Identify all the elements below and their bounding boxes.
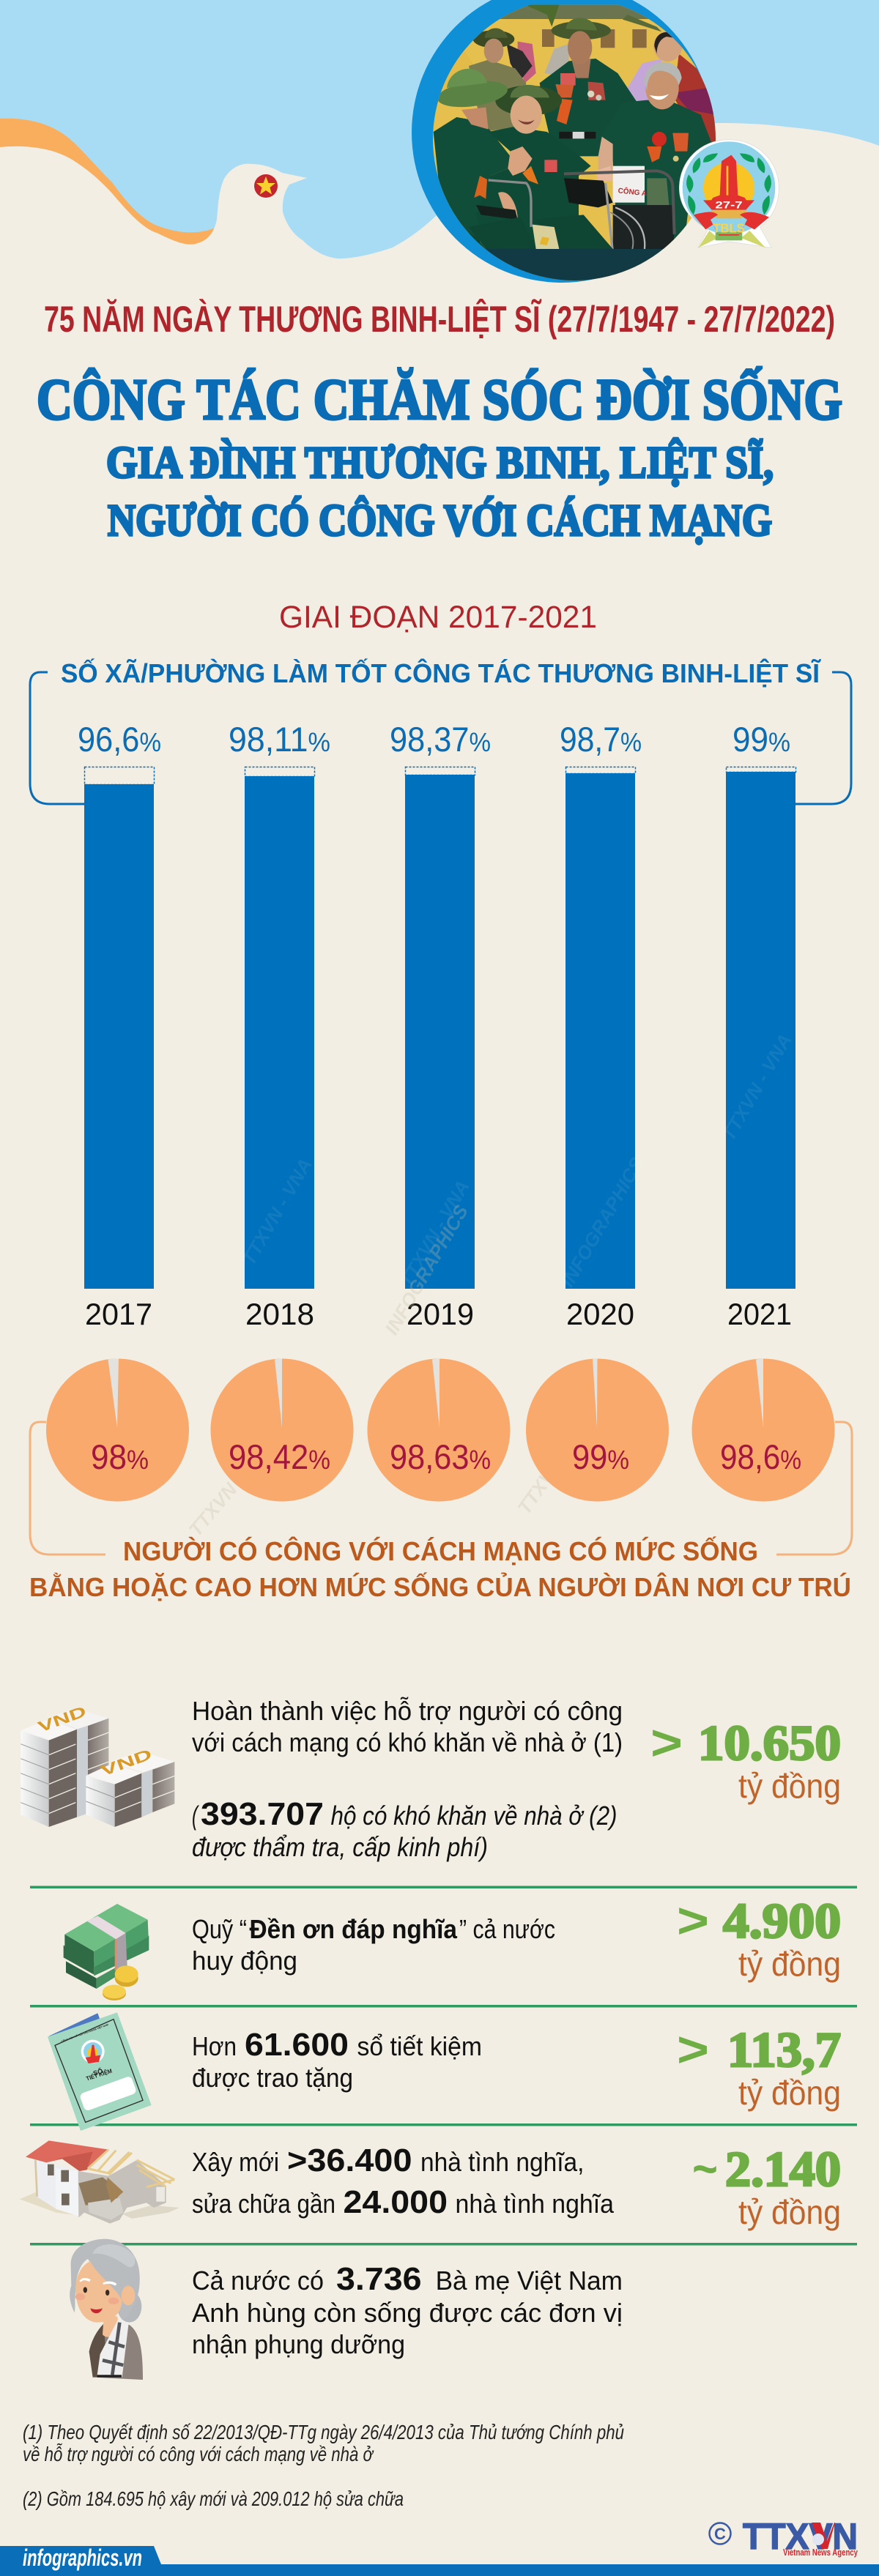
- row 4 value: [692, 2141, 841, 2231]
- icon: VND money stacks: [21, 1703, 174, 1827]
- photo circle: veterans in wheelchairs: [412, 0, 745, 283]
- icon: green banknote bundle with coins: [64, 1904, 149, 2000]
- row 3 value: >: [677, 2022, 709, 2077]
- chart caption: NGƯỜI CÓ CÔNG VỚI CÁCH MẠNG CÓ MỨC SỐNG: [123, 1535, 758, 1566]
- row 5 text: Vietnamese heroic mothers: Cả nước có: [192, 2266, 324, 2296]
- footnotes: [23, 2421, 624, 2510]
- title: NGƯỜI CÓ CÔNG VỚI CÁCH MẠNG: [108, 496, 772, 546]
- bar: 2019: 2019: [407, 1297, 474, 1331]
- icon: TBLS 27-7 emblem: [679, 140, 779, 247]
- row 3 text: savings books: 61.600: [245, 2027, 349, 2063]
- pie: 2020 99%: [526, 1359, 669, 1501]
- row 2 text: fund: Quỹ “: [192, 1914, 247, 1944]
- row 2 value: [677, 1893, 841, 1983]
- bar: 2017: 96,6%: [78, 720, 161, 759]
- pie: 2021 98,6%: 98,6%: [720, 1437, 801, 1476]
- watermarks over bars: TTXVN - VNA: [717, 1030, 796, 1144]
- row 4 text: new and repaired houses: nhà tình nghĩa: [456, 2189, 615, 2219]
- pie: 2020 99%: 99%: [572, 1437, 629, 1476]
- pie: 2021 98,6%: [691, 1359, 835, 1501]
- bar: 2020: 98,7%: [560, 720, 642, 759]
- row 2 text: fund: huy động: [192, 1946, 297, 1976]
- bracket: orange: [30, 1422, 852, 1555]
- pie: 2017 98%: [46, 1358, 189, 1501]
- watermarks over bars: TTXVN - VNA: [513, 1408, 600, 1518]
- footnotes: (1) Theo Quyết định số 22/2013/QĐ-TTg ngày 26/4/2013 của Thủ tướng Chính phủ: [23, 2421, 624, 2443]
- watermarks over bars: TTXVN - VNA: [237, 1155, 316, 1269]
- orange ribbon wave: [0, 119, 217, 253]
- icon: savings passbook: [48, 2012, 152, 2131]
- row 2 text: fund: Đền ơn đáp nghĩa: [249, 1914, 458, 1944]
- bar chart: [78, 720, 795, 1331]
- pie: 2019 98,63%: 98,63%: [390, 1437, 491, 1476]
- row 1 value: >: [650, 1715, 683, 1771]
- row 3 text: savings books: sổ tiết kiệm: [357, 2031, 482, 2061]
- footnotes: về hỗ trợ người có công với cách mạng về nhà ở: [23, 2443, 374, 2465]
- icon: TBLS 27-7 emblem: 27-7: [715, 198, 743, 210]
- row 1 value: [650, 1715, 841, 1805]
- row 3 text: savings books: [192, 2027, 482, 2093]
- footnotes: (2) Gồm 184.695 hộ xây mới và 209.012 hộ sửa chữa: [23, 2487, 404, 2510]
- row 3 text: savings books: Hơn: [192, 2031, 237, 2061]
- row 1 text: housing support: được thẩm tra, cấp kinh phí): [192, 1832, 488, 1862]
- pie: 2017 98%: 98%: [91, 1437, 149, 1476]
- bar: 2020: [560, 720, 642, 1331]
- row 2 text: fund: [192, 1914, 555, 1976]
- row 2 value: tỷ đồng: [738, 1945, 841, 1983]
- row 5 text: Vietnamese heroic mothers: [192, 2261, 623, 2359]
- watermarks over bars: TTXVN - VNA: [395, 1177, 474, 1291]
- row 2 value: 4.900: [723, 1893, 841, 1948]
- row 5 text: Vietnamese heroic mothers: Anh hùng còn sống được các đơn vị: [192, 2298, 623, 2328]
- row 3 value: tỷ đồng: [738, 2074, 841, 2112]
- row 4 text: new and repaired houses: sửa chữa gần: [192, 2189, 335, 2219]
- row 3 value: [677, 2022, 841, 2112]
- row dividers: [30, 1886, 857, 2245]
- bar: 2018: [229, 720, 330, 1331]
- bar: 2021: 99%: [732, 720, 790, 759]
- row 5 text: Vietnamese heroic mothers: nhận phụng dưỡng: [192, 2329, 405, 2359]
- pie: 2018 98,42%: 98,42%: [229, 1437, 330, 1476]
- icon: house cutaway: [20, 2140, 179, 2224]
- row 1 value: 10.650: [698, 1715, 841, 1771]
- row 4 text: new and repaired houses: [192, 2143, 615, 2220]
- row 2 text: fund: ” cả nước: [459, 1914, 555, 1944]
- row 3 value: 113,7: [727, 2022, 841, 2077]
- row 4 text: new and repaired houses: Xây mới: [192, 2147, 279, 2177]
- pie: 2018 98,42%: [211, 1359, 353, 1501]
- icon: VND money stacks: VND: [36, 1703, 89, 1736]
- footer bar: infographics.vn: [23, 2545, 142, 2571]
- watermarks over bars: INFOGRAPHICS: [380, 1201, 472, 1339]
- row 4 value: 2.140: [725, 2141, 841, 2197]
- icon: savings passbook: CỘNG HÒA XÃ HỘI CHỦ NGHĨA VIỆT NAM: [61, 2022, 109, 2043]
- pie: 2019 98,63%: [368, 1359, 510, 1501]
- icon: elderly mother: [70, 2239, 143, 2380]
- row 4 text: new and repaired houses: 24.000: [343, 2184, 448, 2220]
- row 1 text: housing support: Hoàn thành việc hỗ trợ người có công: [192, 1696, 623, 1726]
- row 1 text: housing support: (: [192, 1801, 200, 1831]
- bar: 2017: [78, 720, 161, 1331]
- title: GIA ĐÌNH THƯƠNG BINH, LIỆT SĨ,: [106, 438, 774, 488]
- row 3 text: savings books: được trao tặng: [192, 2063, 353, 2093]
- row 5 text: Vietnamese heroic mothers: 3.736: [336, 2261, 422, 2297]
- row 4 value: tỷ đồng: [738, 2193, 841, 2231]
- icon: savings passbook: SỐ: [92, 2066, 104, 2077]
- bracket: blue: [30, 672, 851, 804]
- row 1 text: housing support: [192, 1696, 623, 1862]
- watermarks over bars: TTXVN - VNA: [185, 1435, 278, 1541]
- row 4 text: new and repaired houses: nhà tình nghĩa,: [420, 2147, 585, 2177]
- bar: 2017: 2017: [85, 1297, 152, 1331]
- watermarks over bars: INFOGRAPHICS: [556, 1153, 648, 1291]
- chart heading: SỐ XÃ/PHƯỜNG LÀM TỐT CÔNG TÁC THƯƠNG BINH-LIỆT SĨ: [61, 658, 821, 688]
- bar: 2021: 2021: [727, 1297, 792, 1331]
- row 1 text: housing support: 393.707: [201, 1796, 324, 1832]
- bar: 2019: 98,37%: [390, 720, 491, 759]
- row 5 text: Vietnamese heroic mothers: Bà mẹ Việt Nam: [436, 2266, 623, 2296]
- photo circle: veterans in wheelchairs: CÔNG AN: [617, 185, 653, 198]
- logo: TTXVN: C: [714, 2525, 726, 2543]
- pie charts: [46, 1358, 835, 1501]
- bar: 2021: [726, 720, 795, 1331]
- row 4 text: new and repaired houses: >36.400: [287, 2143, 412, 2178]
- bar: 2018: 2018: [245, 1297, 314, 1331]
- icon: VND money stacks: VND: [99, 1746, 155, 1780]
- title: [37, 368, 842, 546]
- row 1 text: housing support: với cách mạng có khó khăn về nhà ở (1): [192, 1727, 623, 1757]
- icon: star medal on dove: [254, 174, 278, 198]
- bar: 2019: [390, 720, 491, 1331]
- bar: 2018: 98,11%: [229, 720, 330, 759]
- logo: TTXVN: TTXVN: [743, 2516, 858, 2557]
- row 1 value: tỷ đồng: [738, 1767, 841, 1805]
- row 2 value: >: [677, 1893, 709, 1948]
- bar: 2020: 2020: [566, 1297, 634, 1331]
- watermarks over bars: [185, 1030, 796, 1541]
- row 4 value: ~: [692, 2141, 718, 2197]
- icon: TBLS 27-7 emblem: TBLS: [713, 220, 745, 235]
- row 1 text: housing support: hộ có khó khăn về nhà ở (2): [331, 1801, 617, 1831]
- icon: savings passbook: TIẾT KIỆM: [85, 2067, 113, 2082]
- chart caption: BẰNG HOẶC CAO HƠN MỨC SỐNG CỦA NGƯỜI DÂN NƠI CƯ TRÚ: [29, 1571, 851, 1602]
- chart caption: [29, 1535, 851, 1602]
- sky background: [0, 0, 879, 308]
- period heading: GIAI ĐOẠN 2017-2021: [279, 600, 597, 635]
- footer bar: [0, 2545, 879, 2576]
